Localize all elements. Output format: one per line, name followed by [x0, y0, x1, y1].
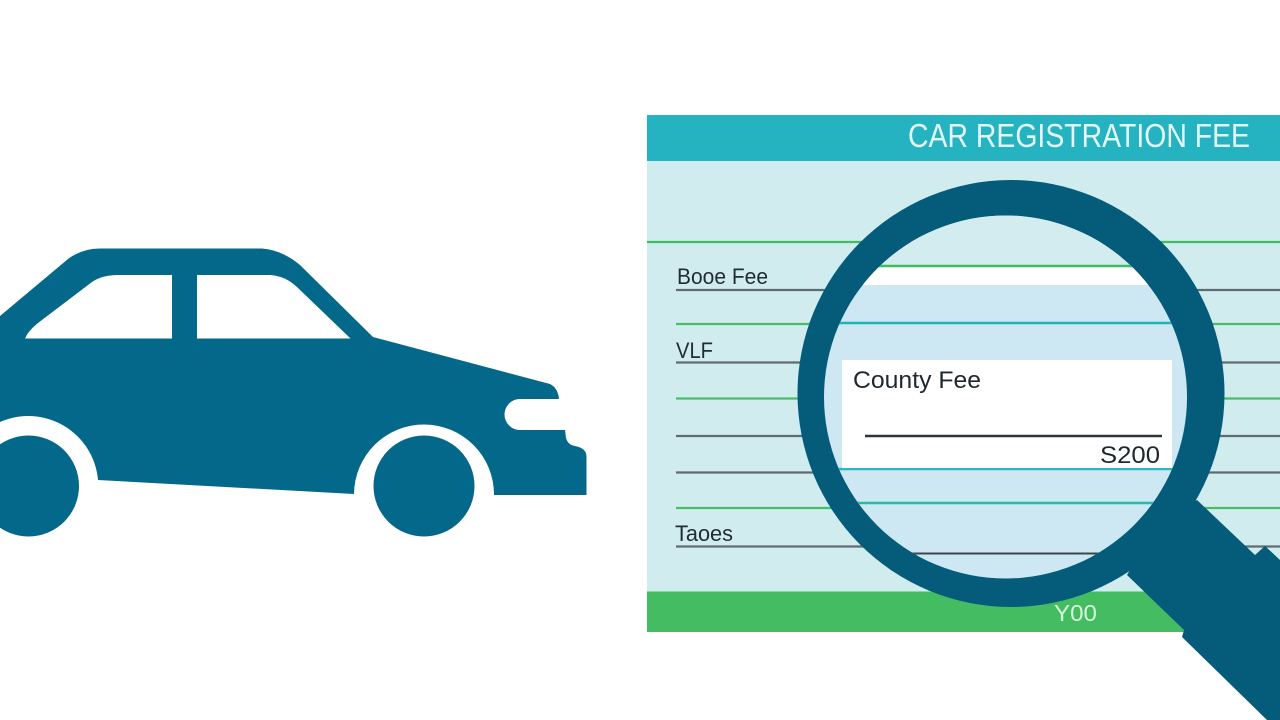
county fee amount: S200 — [1100, 442, 1160, 469]
form rule lines — [647, 242, 1280, 546]
label: VLF: VLF — [676, 338, 713, 363]
icon: magnifying glass — [798, 180, 1280, 720]
label: base fee: Booe Fee — [677, 264, 768, 289]
magnified lens content — [824, 216, 1187, 578]
county fee card — [842, 360, 1172, 469]
green total bar — [647, 592, 1187, 632]
magnifier ring — [798, 180, 1224, 607]
magnifier handle — [1127, 500, 1280, 720]
icon: car silhouette — [0, 248, 586, 536]
header bar — [647, 115, 1280, 161]
total amount: Y00 — [1054, 600, 1097, 626]
panel: registration fee document — [647, 115, 1280, 632]
county fee label: County Fee — [853, 367, 981, 394]
label: taxes: Taoes — [675, 521, 733, 546]
